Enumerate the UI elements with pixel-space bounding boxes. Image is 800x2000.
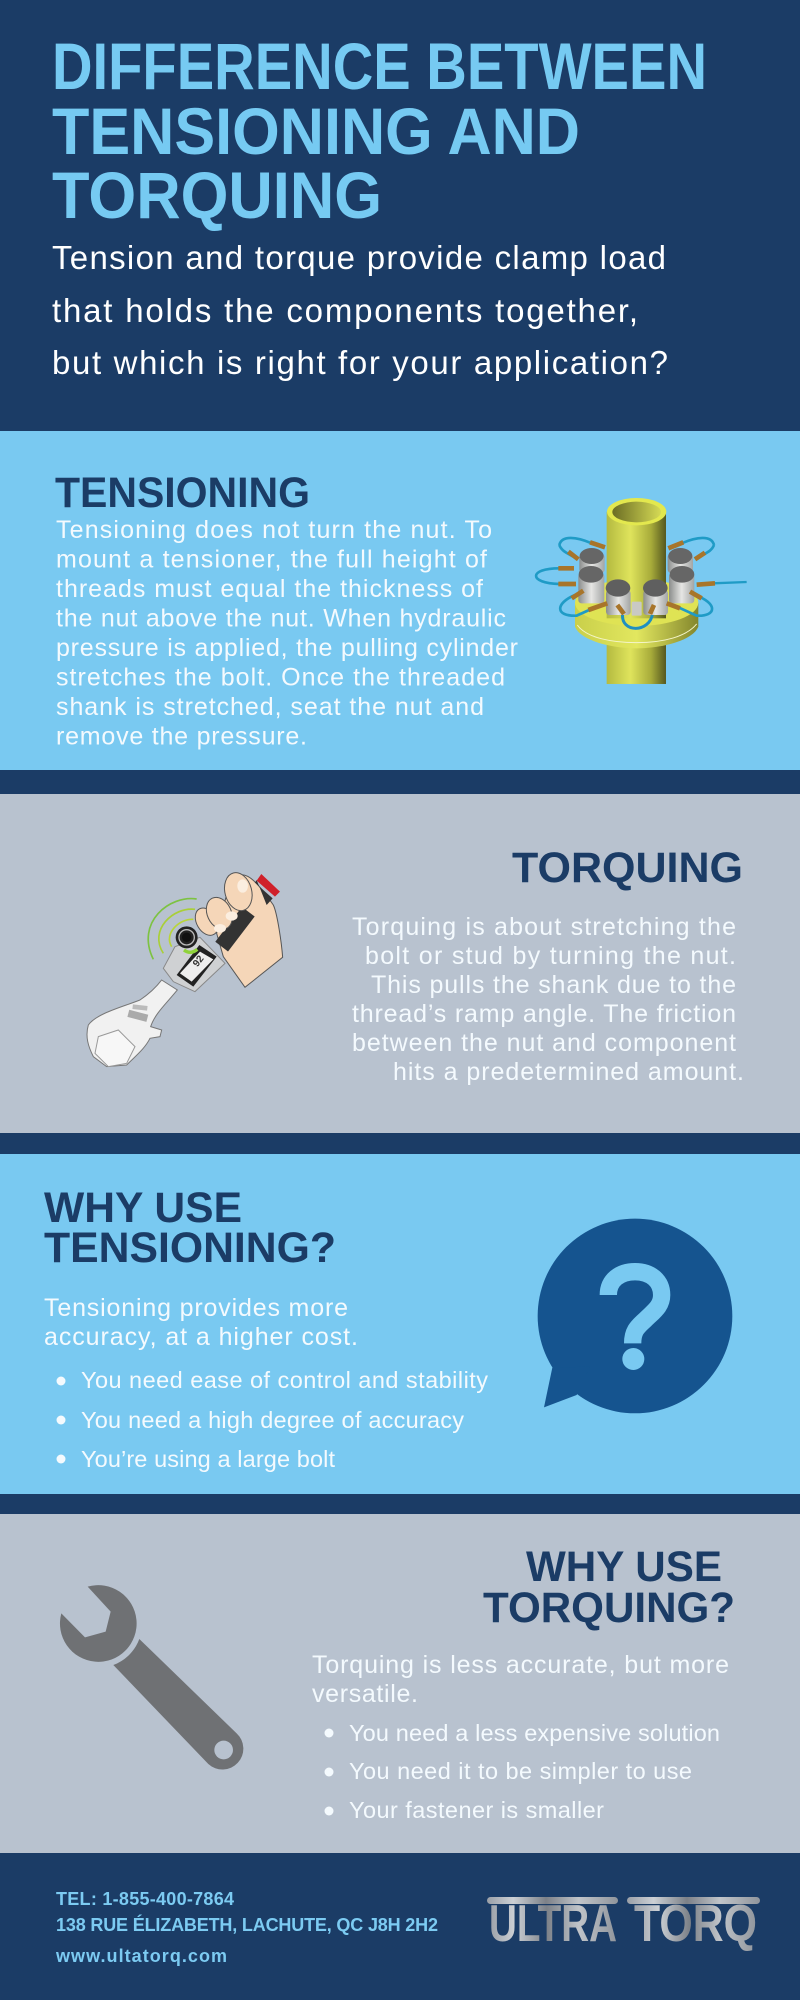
contact details: www.ultatorq.com [55, 1946, 227, 1966]
heading: why use tensioning: WHY USE [44, 1184, 242, 1232]
text block: tensioning description: the nut above the nut. When hydraulic [56, 604, 506, 632]
subtitle: Tension and torque provide clamp load [52, 239, 666, 276]
heading: why use torquing [483, 1543, 735, 1632]
text block: tensioning description: threads must equal the thickness of [56, 575, 483, 603]
text block: tensioning description: Tensioning does not turn the nut. To [56, 516, 492, 544]
heading: why use torquing: WHY USE [526, 1543, 722, 1591]
text block: tensioning description: stretches the bolt. Once the threaded [56, 664, 505, 692]
logo: Ultra Torq [487, 1895, 760, 1953]
text block: torquing description: This pulls the shank due to the [371, 971, 736, 999]
text block: tensioning description [56, 516, 518, 750]
icon: question mark speech bubble [538, 1219, 732, 1413]
bullet list: reasons for tensioning: You’re using a large bolt [81, 1446, 335, 1472]
panel: tensioning [0, 431, 800, 770]
text block: tensioning summary [44, 1294, 358, 1351]
text block: torquing description: between the nut and component [352, 1029, 736, 1057]
text block: tensioning summary: accuracy, at a higher cost. [44, 1323, 358, 1351]
text block: torquing description: thread’s ramp angle. The friction [352, 1000, 736, 1028]
contact details: 138 RUE ÉLIZABETH, LACHUTE, QC J8H 2H2 [56, 1914, 438, 1935]
heading: why use tensioning: TENSIONING? [44, 1224, 336, 1272]
panel: torquing [0, 794, 800, 1133]
bullet list: reasons for torquing [324, 1720, 720, 1823]
text block: torquing description: Torquing is about stretching the [352, 913, 736, 941]
bullet list: reasons for torquing: Your fastener is smaller [349, 1797, 604, 1823]
torque readout: 92 [191, 953, 207, 969]
icon: hydraulic tensioner on pipe flange [536, 498, 747, 684]
icon: hand holding digital torque wrench [87, 870, 283, 1067]
bullet list: reasons for torquing: You need a less expensive solution [349, 1720, 720, 1746]
text block: tensioning description: pressure is applied, the pulling cylinder [56, 634, 518, 662]
title: TENSIONING AND [52, 94, 580, 168]
text block: torquing description: hits a predetermined amount. [393, 1058, 744, 1086]
heading: tensioning: TENSIONING [55, 469, 310, 517]
heading: why use tensioning [44, 1184, 336, 1272]
footer panel [0, 1853, 800, 2000]
divider band [0, 1494, 800, 1514]
heading: why use torquing: TORQUING? [483, 1584, 735, 1632]
contact details: TEL: 1-855-400-7864 [56, 1889, 234, 1909]
icon: wrench [60, 1585, 243, 1770]
title [52, 29, 707, 232]
bullet list: reasons for tensioning [56, 1367, 488, 1472]
bullet list: reasons for tensioning: You need a high degree of accuracy [81, 1407, 464, 1433]
panel: why use tensioning [0, 1154, 800, 1494]
contact details [55, 1889, 438, 1966]
text block: tensioning summary: Tensioning provides more [44, 1294, 348, 1322]
text block: tensioning description: remove the pressure. [56, 722, 307, 750]
title: DIFFERENCE BETWEEN [52, 29, 707, 103]
divider band [0, 1133, 800, 1154]
bullet list: reasons for torquing: You need it to be simpler to use [349, 1758, 692, 1784]
logo: Ultra Torq: ULTRA [489, 1895, 617, 1953]
subtitle: that holds the components together, [52, 292, 638, 329]
text block: tensioning description: shank is stretched, seat the nut and [56, 693, 484, 721]
text block: torquing summary: versatile. [312, 1680, 418, 1708]
header panel [0, 0, 800, 431]
text block: torquing description: bolt or stud by turning the nut. [365, 942, 736, 970]
heading: torquing: TORQUING [512, 844, 743, 892]
text block: tensioning description: mount a tensioner, the full height of [56, 546, 487, 574]
text block: torquing summary: Torquing is less accurate, but more [312, 1651, 729, 1679]
text block: torquing summary [312, 1651, 729, 1708]
text block: torquing description [352, 913, 744, 1086]
title: TORQUING [52, 158, 382, 232]
bullet list: reasons for tensioning: You need ease of control and stability [81, 1367, 488, 1393]
panel: why use torquing [0, 1514, 800, 1853]
divider band [0, 770, 800, 794]
logo: Ultra Torq: TORQ [634, 1895, 757, 1953]
subtitle: but which is right for your application? [52, 344, 668, 381]
subtitle [52, 239, 668, 381]
